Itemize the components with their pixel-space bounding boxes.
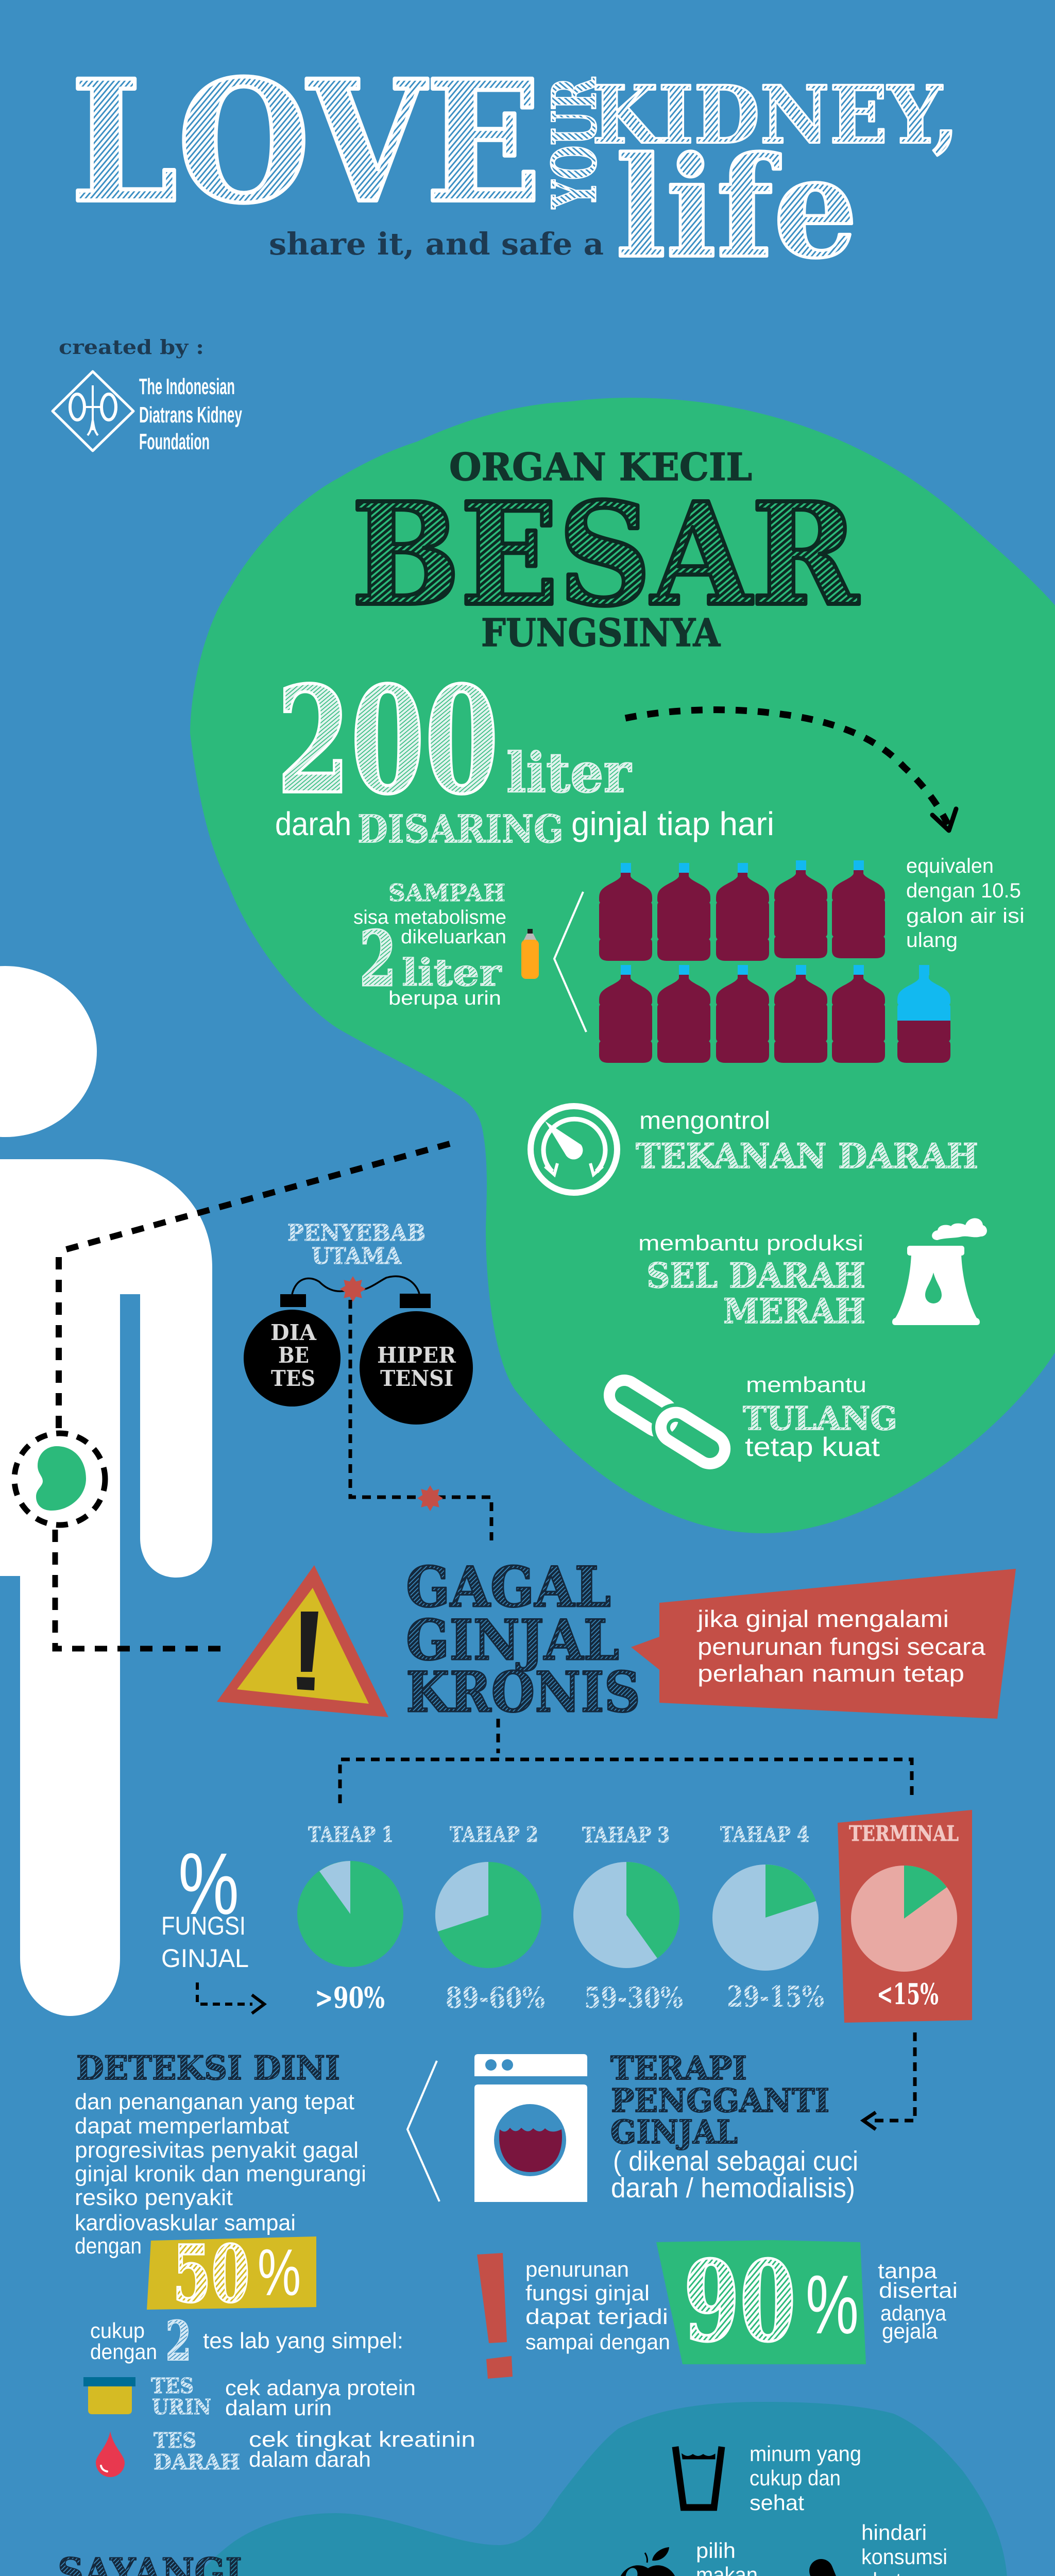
- main title: LOVE: [71, 44, 541, 240]
- text: persen fungsi ginjal: %: [178, 1835, 239, 1933]
- heading: terapi pengganti ginjal: [610, 2049, 829, 2151]
- icon: warning triangle: [217, 1565, 388, 1717]
- stat: 50 percent on yellow: [147, 2228, 316, 2320]
- foundation logo: Diatrans Kidney: [139, 402, 242, 428]
- text: hindari konsumsi obat: [861, 2520, 973, 2576]
- text: minum yang cukup: sehat: [750, 2490, 804, 2515]
- stat: 200 liter darah disaring: [275, 654, 774, 852]
- text: cukup dengan 2 tes lab: [90, 2309, 403, 2373]
- text: equivalen 10.5 galon: [906, 855, 1025, 952]
- text: penurunan fungsi ginjal: sampai dengan: [525, 2330, 670, 2354]
- icon: urine sample cup: [83, 2377, 135, 2414]
- stat: 90 percent on green: %: [806, 2258, 859, 2351]
- callout: definisi gagal ginjal: perlahan namun tetap: [697, 1660, 964, 1687]
- text: mengontrol tekanan darah: TEKANAN DARAH: [636, 1136, 978, 1176]
- stage percentage values: [315, 1977, 939, 2015]
- text: tes urin: dalam urin: [225, 2396, 332, 2420]
- arrow: to stage values: [197, 1982, 264, 2013]
- icon: diabetes bomb: BE: [278, 1343, 309, 1368]
- stat: 90 percent on green: 90: [684, 2237, 796, 2366]
- icon: red exclamation mark: [477, 2253, 513, 2379]
- text: tes urin: cek adanya protein: [225, 2376, 416, 2400]
- text: cukup dengan 2 tes lab: dengan: [90, 2340, 157, 2364]
- text: equivalen 10.5 galon: ulang: [906, 929, 958, 952]
- icon: hipertensi bomb: HIPER: [377, 1343, 456, 1368]
- foundation logo: [53, 371, 242, 454]
- text: produksi sel darah merah: membantu produksi: [638, 1231, 863, 1255]
- text: produksi sel darah merah: MERAH: [723, 1291, 865, 1331]
- text: pilih makan yang sehat: [696, 2538, 758, 2576]
- heading: terapi pengganti ginjal: PENGGANTI: [611, 2081, 829, 2120]
- arrow: dashed curve to bottles: [625, 710, 956, 831]
- text: hindari konsumsi obat: hindari: [861, 2520, 927, 2545]
- text: tanpa disertai gejala: disertai: [879, 2278, 958, 2302]
- icon: diabetes bomb: DIA: [270, 1320, 317, 1345]
- heading: gagal ginjal kronis: GAGAL: [406, 1555, 611, 1620]
- icon: factory cooling tower with drop: [892, 1218, 987, 1325]
- stage labels: TAHAP 2: [450, 1822, 538, 1847]
- connector: dashed line from causes to gagal ginjal: [350, 1300, 491, 1540]
- icon: chain link: [604, 1375, 730, 1469]
- callout: definisi gagal ginjal: jika ginjal mengalami: [696, 1605, 949, 1632]
- stat: 200 liter darah disaring: ginjal tiap hari: [571, 805, 774, 842]
- text: penurunan fungsi ginjal: dapat terjadi: [525, 2304, 668, 2329]
- icon: diabetes bomb: [244, 1294, 341, 1406]
- text: tes urin: URIN: [152, 2395, 211, 2419]
- heading: penyebab utama: [287, 1220, 426, 1269]
- heading: organ kecil besar fungsinya: FUNGSINYA: [481, 611, 721, 655]
- text: membantu tulang tetap kuat: tetap kuat: [745, 1432, 880, 1462]
- text: sampah 2 liter urin: liter: [402, 951, 502, 994]
- text: membantu tulang tetap kuat: membantu: [746, 1372, 866, 1397]
- heading: gagal ginjal kronis: [406, 1555, 640, 1725]
- icon: kidney in dashed circle: [14, 1433, 105, 1525]
- icon: hipertensi bomb: [360, 1294, 473, 1425]
- text: cukup dengan 2 tes lab: cukup: [90, 2318, 145, 2343]
- text: tanpa disertai gejala: tanpa: [878, 2259, 938, 2283]
- stat: 200 liter darah disaring: darah: [275, 805, 351, 842]
- icon: orange urine bottle: [521, 929, 539, 979]
- stage labels: TAHAP 4: [720, 1822, 809, 1847]
- main title: share it, and safe a: [269, 226, 604, 262]
- text: sampah 2 liter urin: berupa urin: [388, 988, 501, 1009]
- heading: gagal ginjal kronis: KRONIS: [406, 1660, 640, 1725]
- text: tes urin: [151, 2374, 416, 2420]
- icon: hipertensi bomb: TENSI: [380, 1366, 453, 1391]
- text: penurunan fungsi ginjal: [525, 2257, 670, 2354]
- text: equivalen 10.5 galon: galon air isi: [906, 905, 1025, 927]
- chart: stage 1 pie >90%: [297, 1861, 403, 1967]
- chart: stage 2 pie 89-60%: [435, 1862, 541, 1968]
- text: persen fungsi ginjal: [161, 1835, 249, 1973]
- text: sampah 2 liter urin: [353, 879, 506, 1009]
- foundation logo: The Indonesian: [139, 374, 235, 399]
- text: sampah 2 liter urin: sisa metabolisme: [353, 907, 506, 928]
- stage percentage values: 29-15%: [727, 1980, 824, 2014]
- stage labels: TAHAP 1: [308, 1822, 394, 1847]
- stat: 200 liter darah disaring: 200: [277, 654, 499, 826]
- icon: washing machine dialysis: [474, 2054, 587, 2202]
- icon: glass of water: [675, 2447, 722, 2507]
- text: mengontrol tekanan darah: [636, 1107, 978, 1176]
- chart: terminal pie <15%: [851, 1866, 957, 1972]
- stat: 50 percent on yellow: 50: [173, 2228, 250, 2320]
- stage labels: TAHAP 3: [582, 1823, 670, 1848]
- text: deteksi dini description: [75, 2089, 366, 2259]
- text: penurunan fungsi ginjal: fungsi ginjal: [525, 2281, 650, 2305]
- text: sampah 2 liter urin: 2: [359, 914, 397, 1004]
- panel: terminal highlight: [838, 1810, 972, 2023]
- heading: gagal ginjal kronis: GINJAL: [406, 1608, 619, 1673]
- text: tes darah: cek tingkat kreatinin: [249, 2427, 475, 2451]
- main title: life: [616, 127, 858, 289]
- text: membantu tulang tetap kuat: TULANG: [743, 1399, 897, 1437]
- text: produksi sel darah merah: SEL DARAH: [646, 1256, 865, 1296]
- text: mengontrol tekanan darah: mengontrol: [639, 1107, 770, 1134]
- connector: bomb fuses with spark: [292, 1276, 419, 1302]
- heading: deteksi dini: DETEKSI DINI: [76, 2049, 340, 2088]
- heading: terapi pengganti ginjal: GINJAL: [610, 2113, 738, 2151]
- text: membantu tulang tetap kuat: [743, 1372, 897, 1462]
- text: dikenal sebagai cuci darah: [611, 2146, 858, 2204]
- text: dikenal sebagai cuci darah: darah / hemodialisis): [611, 2173, 855, 2204]
- human figure silhouette: [0, 966, 212, 2016]
- stage percentage values: 89-60%: [446, 1981, 545, 2015]
- chevron line: [407, 2061, 439, 2201]
- main title: KIDNEY,: [592, 69, 959, 162]
- panel: healthy habits teal blob: [152, 2402, 1016, 2576]
- icon: apple: [618, 2547, 678, 2576]
- text: tes urin: TES: [151, 2374, 194, 2398]
- arrow: terminal to therapy: [863, 2032, 915, 2129]
- text: tes darah: [154, 2427, 475, 2475]
- text: persen fungsi ginjal: GINJAL: [161, 1944, 249, 1973]
- connector: dashed line from kidney to warning: [55, 1530, 224, 1649]
- connector: dashed line from body to function panel: [59, 1144, 450, 1428]
- text: deteksi dini description: progresivitas penyakit gagal: [75, 2138, 359, 2163]
- text: deteksi dini description: dengan: [75, 2233, 142, 2259]
- text: cukup dengan 2 tes lab: tes lab yang simpel:: [203, 2328, 403, 2353]
- text: minum yang cukup: [750, 2442, 861, 2515]
- stage percentage values: >90%: [315, 1981, 385, 2015]
- callout: definisi gagal ginjal: penurunan fungsi secara: [697, 1633, 985, 1660]
- main title: YOUR: [539, 77, 610, 209]
- stat: 50 percent on yellow: %: [258, 2236, 301, 2310]
- panel: kidney functions green blob: [190, 398, 1055, 1533]
- icon: pills: [775, 2571, 843, 2576]
- text: deteksi dini description: dan penanganan yang tepat: [75, 2089, 354, 2114]
- stage labels: [308, 1821, 959, 1848]
- icon: blood drop: [96, 2431, 125, 2477]
- text: tanpa disertai gejala: [878, 2259, 958, 2343]
- stage percentage values: <15%: [877, 1977, 939, 2011]
- text: tanpa disertai gejala: adanya: [880, 2301, 947, 2325]
- stat: 200 liter darah disaring: DISARING: [358, 807, 564, 852]
- connector: dashed tree to stages: [340, 1719, 912, 1803]
- chart: stage 4 pie 29-15%: [712, 1865, 819, 1971]
- heading: organ kecil besar fungsinya: BESAR: [351, 472, 860, 637]
- main title: [71, 44, 959, 289]
- text: sampah 2 liter urin: SAMPAH: [388, 879, 505, 907]
- icon: blood pressure gauge: [531, 1106, 617, 1193]
- heading: penyebab utama: PENYEBAB: [287, 1220, 426, 1246]
- chart: gallon bottles pictogram: [599, 860, 950, 1063]
- text: equivalen 10.5 galon: dengan 10.5: [906, 879, 1021, 902]
- icon: diabetes bomb: TES: [271, 1366, 315, 1391]
- text: deteksi dini description: resiko penyakit: [75, 2185, 233, 2210]
- stage labels: TERMINAL: [849, 1821, 959, 1846]
- credit: created by: created by :: [59, 335, 204, 359]
- stat: 200 liter darah disaring: liter: [506, 740, 632, 805]
- text: persen fungsi ginjal: FUNGSI: [161, 1911, 246, 1940]
- text: equivalen 10.5 galon: equivalen: [906, 855, 994, 877]
- text: penurunan fungsi ginjal: penurunan: [525, 2257, 629, 2281]
- text: pilih makan yang sehat: pilih: [696, 2538, 736, 2563]
- text: deteksi dini description: kardiovaskular sampai: [75, 2210, 296, 2235]
- heading: penyebab utama: UTAMA: [312, 1243, 402, 1269]
- chart: stage 3 pie 59-30%: [573, 1862, 679, 1968]
- text: tanpa disertai gejala: gejala: [882, 2319, 938, 2343]
- text: cukup dengan 2 tes lab: 2: [165, 2309, 192, 2373]
- text: minum yang cukup: minum yang: [750, 2442, 861, 2466]
- text: sampah 2 liter urin: dikeluarkan: [401, 926, 506, 948]
- text: produksi sel darah merah: [638, 1231, 865, 1331]
- text: deteksi dini description: ginjal kronik dan mengurangi: [75, 2161, 366, 2187]
- text: deteksi dini description: dapat memperlambat: [75, 2113, 289, 2139]
- text: tes darah: TES: [154, 2428, 196, 2453]
- text: minum yang cukup: cukup dan: [750, 2466, 841, 2490]
- text: hindari konsumsi obat: konsumsi: [861, 2545, 947, 2569]
- bracket line: [554, 892, 586, 1032]
- heading: terapi pengganti ginjal: TERAPI: [610, 2049, 747, 2087]
- foundation logo: Foundation: [139, 429, 210, 454]
- heading: organ kecil besar fungsinya: ORGAN KECIL: [449, 445, 752, 489]
- stage percentage values: 59-30%: [584, 1981, 683, 2015]
- text: tes darah: dalam darah: [249, 2447, 371, 2471]
- text: dikenal sebagai cuci darah: ( dikenal sebagai cuci: [613, 2146, 858, 2177]
- callout: definisi gagal ginjal: [631, 1569, 1016, 1719]
- text: tes darah: DARAH: [154, 2450, 240, 2475]
